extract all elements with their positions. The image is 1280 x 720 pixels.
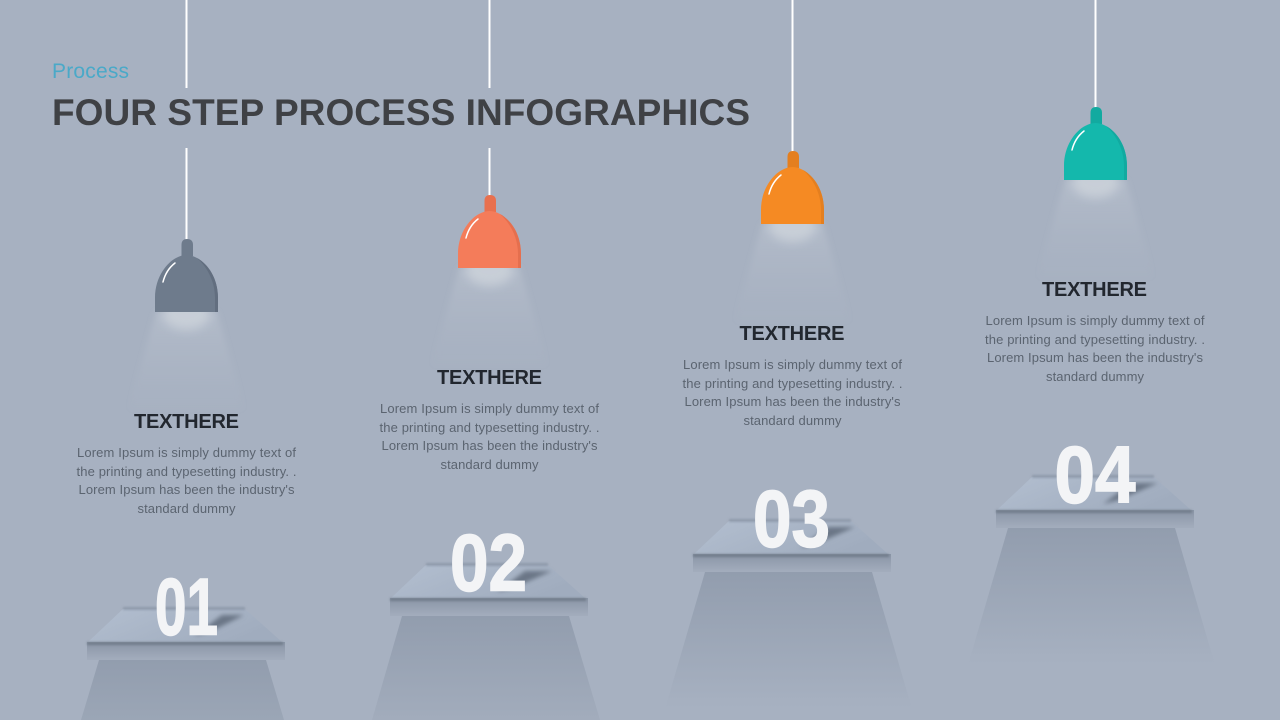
description 3: the printing and typesetting industry. . bbox=[682, 376, 902, 391]
description 1: Lorem Ipsum has been the industry's bbox=[78, 482, 295, 497]
description 3 bbox=[682, 357, 902, 428]
heading 2: TEXTHERE bbox=[437, 367, 542, 389]
pedestal 3 bbox=[665, 572, 912, 709]
heading 1: TEXTHERE bbox=[134, 411, 239, 433]
description 2: standard dummy bbox=[440, 457, 539, 472]
lamp cord 2 bbox=[488, 0, 490, 198]
lamp glow 3 bbox=[768, 210, 816, 242]
panel: step 3 bbox=[665, 0, 912, 709]
description 4: the printing and typesetting industry. . bbox=[985, 332, 1205, 347]
lamp glow 2 bbox=[466, 254, 514, 286]
panel: step 1 bbox=[76, 0, 296, 720]
description 3: Lorem Ipsum is simply dummy text of bbox=[683, 357, 902, 372]
description 2: Lorem Ipsum has been the industry's bbox=[382, 438, 598, 453]
lamp cord 1 bbox=[186, 0, 188, 242]
description 3: standard dummy bbox=[744, 413, 842, 428]
lamp 1 bbox=[155, 239, 218, 312]
number 03: 03 bbox=[753, 474, 830, 564]
description 2: the printing and typesetting industry. . bbox=[380, 420, 600, 435]
heading 3: TEXTHERE bbox=[740, 323, 844, 345]
lamp 4 bbox=[1064, 107, 1127, 180]
eyebrow: Process: Process bbox=[52, 60, 129, 83]
description 4: Lorem Ipsum is simply dummy text of bbox=[986, 313, 1205, 328]
lamp cord 3 bbox=[792, 0, 794, 154]
description 4: Lorem Ipsum has been the industry's bbox=[987, 350, 1204, 365]
lamp glow 4 bbox=[1072, 166, 1120, 198]
number 02: 02 bbox=[450, 518, 527, 608]
panel: step 4 bbox=[968, 0, 1215, 665]
platform 2 bbox=[390, 563, 588, 616]
lamp 3 bbox=[761, 151, 824, 224]
description 2: Lorem Ipsum is simply dummy text of bbox=[380, 401, 599, 416]
description 3: Lorem Ipsum has been the industry's bbox=[684, 394, 901, 409]
pedestal 1 bbox=[81, 660, 284, 720]
description 1 bbox=[76, 445, 296, 516]
description 1: the printing and typesetting industry. . bbox=[76, 464, 296, 479]
light beam 2 bbox=[431, 268, 548, 368]
platform 4 bbox=[996, 475, 1194, 528]
heading 4: TEXTHERE bbox=[1042, 279, 1147, 301]
lamp 2 bbox=[458, 195, 521, 268]
light beam 1 bbox=[128, 312, 245, 412]
platform 3 bbox=[693, 519, 891, 572]
light beam 4 bbox=[1037, 180, 1154, 280]
description 1: Lorem Ipsum is simply dummy text of bbox=[77, 445, 296, 460]
lamp glow 1 bbox=[162, 298, 210, 330]
platform 1 bbox=[87, 607, 285, 660]
pedestal 2 bbox=[372, 616, 600, 720]
description 4 bbox=[985, 313, 1205, 384]
description 2 bbox=[380, 401, 600, 472]
panel: step 2 bbox=[372, 0, 600, 720]
lamp cord 4 bbox=[1094, 0, 1096, 110]
number 04: 04 bbox=[1054, 430, 1136, 520]
light beam 3 bbox=[734, 224, 851, 324]
number 01: 01 bbox=[155, 562, 218, 652]
description 1: standard dummy bbox=[138, 501, 236, 516]
title: FOUR STEP PROCESS INFOGRAPHICS bbox=[52, 92, 750, 133]
description 4: standard dummy bbox=[1046, 369, 1144, 384]
pedestal 4 bbox=[968, 528, 1215, 665]
